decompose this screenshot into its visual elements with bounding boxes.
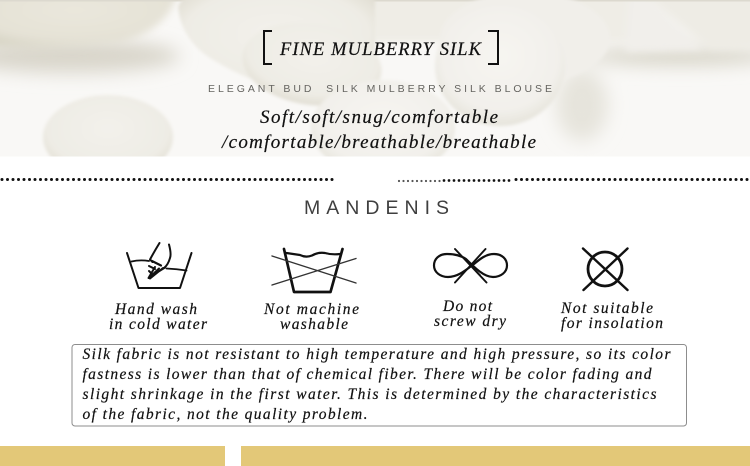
label: not suitable for insolation <box>560 300 663 332</box>
subtitle: ELEGANT BUD SILK MULBERRY SILK BLOUSE <box>208 83 552 95</box>
label: hand wash: in cold water <box>109 316 208 333</box>
callout: care note: fastness is lower than that of chemical fiber. There will be color fading and <box>82 366 652 383</box>
icon: not suitable for sun drying <box>583 248 628 290</box>
label: do not screw dry: Do not <box>442 298 493 315</box>
callout: care note: of the fabric, not the quality problem. <box>82 406 368 423</box>
hero tagline: Soft/soft/snug/comfortable <box>260 107 498 128</box>
label: not machine washable: washable <box>280 316 348 333</box>
icon: hand wash <box>127 243 192 288</box>
callout: care note: Silk fabric is not resistant to high temperature and high pressure, so its color <box>82 346 671 363</box>
label: not machine washable <box>263 301 359 333</box>
label: not machine washable: Not machine <box>263 301 359 318</box>
label: hand wash: Hand wash <box>114 301 197 318</box>
label: not suitable for insolation: for insolation <box>561 315 663 332</box>
gold footer bars <box>0 446 750 466</box>
hero tagline: /comfortable/breathable/breathable <box>221 132 536 153</box>
hero photo: silk cocoons <box>0 0 750 156</box>
label: hand wash <box>109 301 208 333</box>
label: do not screw dry: screw dry <box>434 313 506 330</box>
dotted divider <box>2 180 750 181</box>
brand name: MANDENIS <box>304 197 449 219</box>
hero tagline <box>221 107 536 153</box>
title bracket frame and heading: FINE MULBERRY SILK <box>279 40 483 60</box>
icon: not machine washable <box>272 249 356 292</box>
label: not suitable for insolation: Not suitable <box>560 300 653 317</box>
title bracket frame and heading <box>264 31 498 64</box>
callout: care note <box>72 344 686 426</box>
icon: do not screw dry <box>434 249 507 282</box>
label: do not screw dry <box>434 298 506 330</box>
callout: care note: slight shrinkage in the first water. This is determined by the characteristics <box>82 386 657 403</box>
